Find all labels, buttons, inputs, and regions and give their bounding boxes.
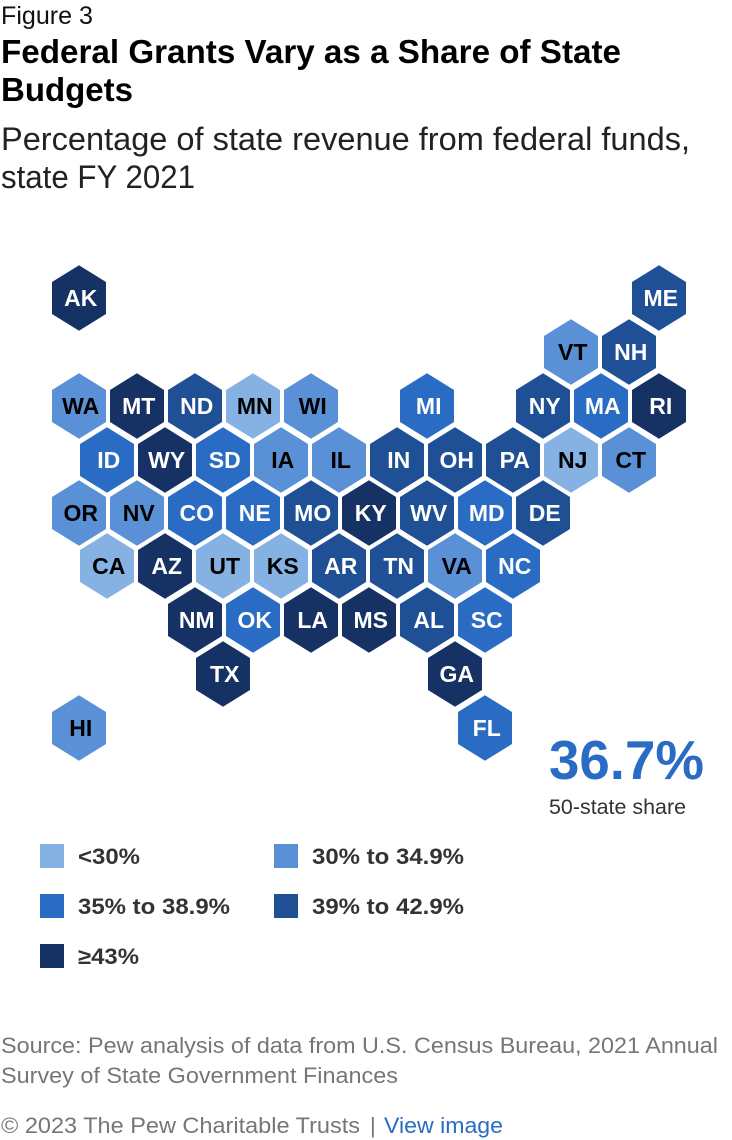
state: NC: NC <box>498 553 531 579</box>
state: AR <box>312 533 366 599</box>
title <box>1 33 621 108</box>
state: MT: MT <box>122 393 155 419</box>
state: MI: MI <box>416 393 441 419</box>
state: KY: KY <box>355 500 387 526</box>
state: MN: MN <box>237 393 273 419</box>
state: IN <box>370 427 424 493</box>
state: NH <box>602 319 656 385</box>
state: WV <box>400 480 454 546</box>
legend item: 35% to 38.9%: 35% to 38.9% <box>78 894 230 919</box>
state: NC <box>486 533 540 599</box>
state: KS: KS <box>267 553 299 579</box>
state: OH: OH <box>439 447 474 473</box>
state: MA <box>574 373 628 439</box>
state: WA <box>52 373 106 439</box>
state: CA: CA <box>92 553 125 579</box>
state: AL: AL <box>413 607 444 633</box>
state: LA <box>284 587 338 653</box>
state: DE <box>516 480 570 546</box>
state: GA: GA <box>439 661 474 687</box>
state: PA <box>486 427 540 493</box>
state: IL <box>312 427 366 493</box>
legend <box>40 844 464 969</box>
state: VA: VA <box>442 553 472 579</box>
state: AR: AR <box>324 553 358 579</box>
state: CA <box>80 533 134 599</box>
legend item: 39% to 42.9%: 39% to 42.9% <box>312 894 464 919</box>
state: IA: IA <box>271 447 294 473</box>
state: HI <box>52 695 106 761</box>
legend item: 43% or more: ≥43% <box>78 944 139 969</box>
state: NY <box>516 373 570 439</box>
state: NM: NM <box>179 607 215 633</box>
state: NE <box>226 480 280 546</box>
state: UT <box>196 533 250 599</box>
source note <box>1 1033 718 1088</box>
state: SD <box>196 427 250 493</box>
state: ID: ID <box>97 447 120 473</box>
state: KY <box>342 480 396 546</box>
state: WI <box>284 373 338 439</box>
state: WA: WA <box>62 393 99 419</box>
state: SC <box>458 587 512 653</box>
legend item: under 30% <box>40 844 140 869</box>
copyright and link: View image <box>384 1113 503 1138</box>
state: NJ: NJ <box>558 447 587 473</box>
state: WY: WY <box>148 447 185 473</box>
source note: Source: Pew analysis of data from U.S. Census Bureau, 2021 Annual <box>1 1033 718 1058</box>
copyright and link: © 2023 The Pew Charitable Trusts <box>1 1113 360 1138</box>
state: AL <box>400 587 454 653</box>
state: TN <box>370 533 424 599</box>
state: MA: MA <box>585 393 621 419</box>
callout: 50-state share: 36.7% <box>549 729 704 791</box>
state: MI <box>400 373 454 439</box>
subtitle: state FY 2021 <box>1 159 195 195</box>
state: NM <box>168 587 222 653</box>
state: GA <box>428 641 482 707</box>
state: NJ <box>544 427 598 493</box>
state: CO <box>168 480 222 546</box>
legend item: 43% or more <box>40 944 139 969</box>
state: MS <box>342 587 396 653</box>
state: WV: WV <box>410 500 448 526</box>
hexagon tile map of states <box>52 265 686 761</box>
state: MN <box>226 373 280 439</box>
state: OK <box>226 587 280 653</box>
state: MS: MS <box>353 607 388 633</box>
copyright and link: | <box>370 1113 376 1138</box>
state: MD <box>458 480 512 546</box>
state: DE: DE <box>529 500 561 526</box>
state: NY: NY <box>529 393 561 419</box>
state: IN: IN <box>387 447 410 473</box>
subtitle <box>1 121 690 195</box>
state: NE: NE <box>239 500 271 526</box>
state: OK: OK <box>237 607 272 633</box>
state: IL: IL <box>330 447 351 473</box>
state: HI: HI <box>69 715 92 741</box>
state: WY <box>138 427 192 493</box>
state: AZ: AZ <box>151 553 182 579</box>
legend item: under 30%: <30% <box>78 844 140 869</box>
title: Budgets <box>1 71 133 108</box>
source note: Survey of State Government Finances <box>1 1063 398 1088</box>
state: OR <box>52 480 106 546</box>
state: ID <box>80 427 134 493</box>
subtitle: Percentage of state revenue from federal funds, <box>1 121 690 157</box>
state: TX: TX <box>210 661 240 687</box>
state: NV: NV <box>123 500 155 526</box>
state: FL: FL <box>473 715 501 741</box>
state: KS <box>254 533 308 599</box>
state: TX <box>196 641 250 707</box>
state: VA <box>428 533 482 599</box>
title: Federal Grants Vary as a Share of State <box>1 33 621 70</box>
state: AK: AK <box>64 285 98 311</box>
state: OR: OR <box>63 500 98 526</box>
state: OH <box>428 427 482 493</box>
state: MD: MD <box>469 500 505 526</box>
state: ME <box>632 265 686 331</box>
copyright and link <box>1 1113 503 1138</box>
state: UT: UT <box>209 553 240 579</box>
figure label: Figure 3 <box>1 2 93 30</box>
state: VT <box>544 319 598 385</box>
state: ME: ME <box>643 285 678 311</box>
state: FL <box>458 695 512 761</box>
state: IA <box>254 427 308 493</box>
state: RI <box>632 373 686 439</box>
state: AK <box>52 265 106 331</box>
state: SC: SC <box>471 607 503 633</box>
state: VT: VT <box>558 339 587 365</box>
state: MT <box>110 373 164 439</box>
callout: 50-state share <box>549 729 704 819</box>
state: MO <box>284 480 338 546</box>
state: SD: SD <box>209 447 241 473</box>
state: ND <box>168 373 222 439</box>
state: ND: ND <box>180 393 213 419</box>
state: TN: TN <box>383 553 414 579</box>
callout: 50-state share: 50-state share <box>549 796 686 819</box>
state: NH: NH <box>614 339 647 365</box>
state: MO: MO <box>294 500 331 526</box>
state: CO: CO <box>179 500 214 526</box>
state: RI: RI <box>649 393 672 419</box>
state: AZ <box>138 533 192 599</box>
state: WI: WI <box>299 393 327 419</box>
state: PA: PA <box>500 447 530 473</box>
state: LA: LA <box>297 607 328 633</box>
legend item: 30% to 34.9%: 30% to 34.9% <box>312 844 464 869</box>
state: NV <box>110 480 164 546</box>
state: CT <box>602 427 656 493</box>
state: CT: CT <box>615 447 646 473</box>
